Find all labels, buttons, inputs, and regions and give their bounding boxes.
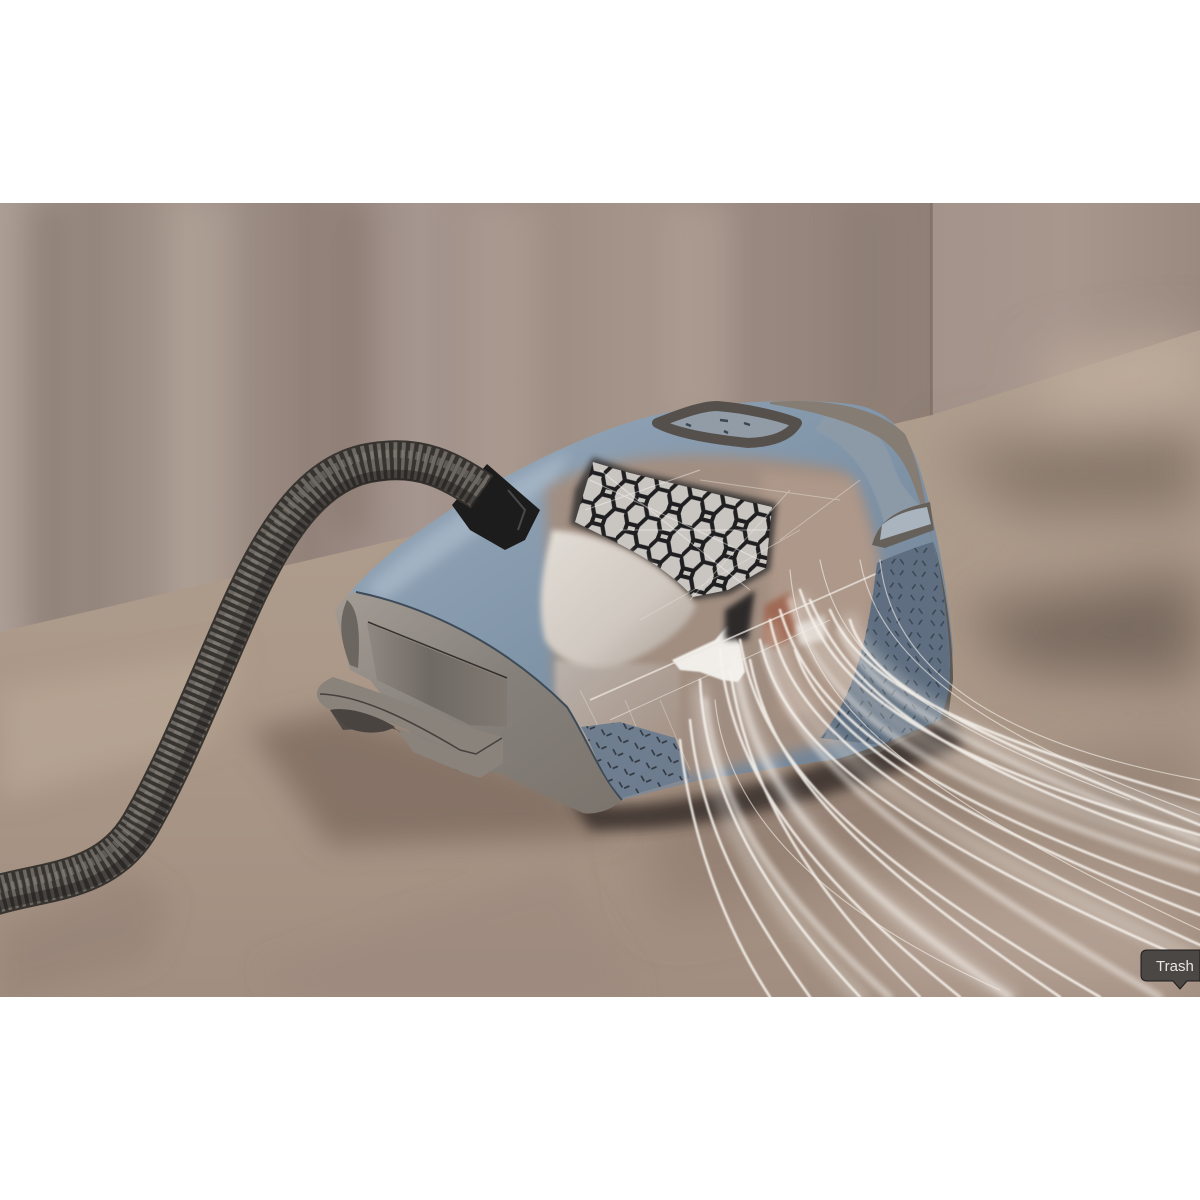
room background wall [0,203,1200,632]
hose connector [452,464,540,550]
filter honeycomb [570,457,777,600]
lower cutaway panel [552,658,680,758]
control panel [657,406,797,443]
vacuum body [317,401,965,830]
rear recess [367,623,507,727]
photo: vacuum cleaner scene [0,203,1200,1000]
carry handle [317,677,503,778]
tooltip: Trash: Trash [1156,958,1194,975]
floor shadows [640,335,1200,997]
rear grey housing [335,592,622,814]
cutaway translucent area [545,455,877,795]
corrugated hose [0,454,485,908]
right lower edge [820,540,953,765]
tooltip: Trash [1141,950,1200,989]
dust bag [541,530,696,667]
lower blue base panel with grille [581,722,690,798]
contact shadow [570,715,965,830]
soft glow [700,600,1200,997]
cut line highlight and scratches [580,480,880,770]
right vent grille [820,542,950,745]
lid rim grey top right [817,416,918,522]
floor [0,330,1200,1000]
blue upper shell [336,401,953,800]
right side silver strip [872,502,934,548]
white debris and orange motor [672,590,825,682]
airflow streams [680,560,1200,997]
